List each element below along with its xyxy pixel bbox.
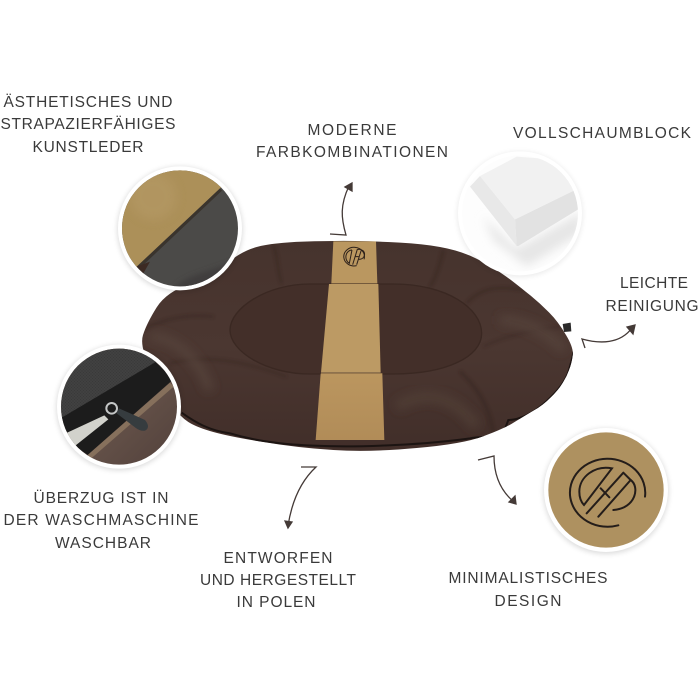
circle white border [118, 166, 242, 290]
leather seam [88, 383, 174, 458]
zipper along bed hem [182, 352, 573, 446]
tan leather disc [548, 432, 664, 548]
text: washable cover [4, 489, 198, 552]
dog bed product photo [142, 241, 573, 451]
small bed logo [344, 247, 365, 266]
text: washable cover: ÜBERZUG IST IN [34, 489, 168, 507]
text: washable cover: WASCHBAR [55, 535, 151, 552]
text: artificial leather: STRAPAZIERFÄHIGES [0, 116, 176, 133]
circle shadow [117, 167, 243, 292]
text: artificial leather: ÄSTHETISCHES UND [4, 94, 172, 111]
zipper pull [106, 403, 117, 414]
text: easy cleaning: REINIGUNG [606, 298, 698, 315]
text: minimalist design: DESIGN [494, 593, 562, 610]
text: foam block: VOLLSCHAUMBLOCK [513, 125, 692, 142]
circle white border [544, 428, 668, 552]
circle shadow [457, 152, 583, 277]
leather swatch [122, 170, 238, 286]
white lining [66, 415, 108, 445]
foam top face [480, 157, 575, 219]
foam left side [470, 176, 517, 246]
text: made in Poland [200, 550, 357, 611]
tan stripe: front rim [316, 374, 384, 440]
zipper image [60, 348, 177, 465]
text: washable cover: DER WASCHMASCHINE [4, 512, 198, 529]
side label tag [563, 323, 571, 332]
text: colour combinations: MODERNE [308, 122, 396, 139]
tan stripe: back rim [331, 241, 377, 283]
text: artificial leather: KUNSTLEDER [32, 139, 144, 156]
text: made in Poland: ENTWORFEN [224, 550, 332, 567]
circle shadow [56, 345, 182, 470]
callout circle: foam block [457, 150, 583, 277]
bed outer body [142, 241, 573, 451]
text: colour combinations [256, 122, 448, 161]
foam right side [515, 190, 578, 246]
callout circle: zipper [55, 343, 185, 473]
text: easy cleaning: LEICHTE [620, 275, 688, 292]
DFP monogram [570, 459, 645, 527]
circle white border [458, 151, 582, 275]
arrow: to bed top stripe [330, 183, 352, 235]
stripe seams [321, 283, 382, 373]
text: minimalist design [448, 570, 608, 610]
callout circle: logo [543, 428, 669, 554]
tan stripe: centre [321, 284, 381, 373]
mesh fabric [61, 348, 156, 418]
callout circle: leather material [117, 166, 243, 293]
text: artificial leather [0, 94, 176, 156]
circle shadow [543, 429, 669, 554]
bed folds and shading [143, 245, 573, 446]
arrow: to logo detail [478, 456, 516, 504]
text: colour combinations: FARBKOMBINATIONEN [256, 144, 448, 161]
text: made in Poland: IN POLEN [236, 594, 316, 611]
bed inner sleeping area [230, 284, 482, 374]
zipper tape [60, 362, 173, 455]
arrow: from bed to Poland note [285, 467, 316, 528]
foam image [470, 156, 578, 267]
text: minimalist design: MINIMALISTISCHES [448, 570, 608, 587]
arrow: to bed right side [582, 325, 635, 348]
text: easy cleaning [606, 275, 698, 315]
circle white border [57, 345, 181, 469]
text: made in Poland: UND HERGESTELLT [200, 572, 357, 589]
